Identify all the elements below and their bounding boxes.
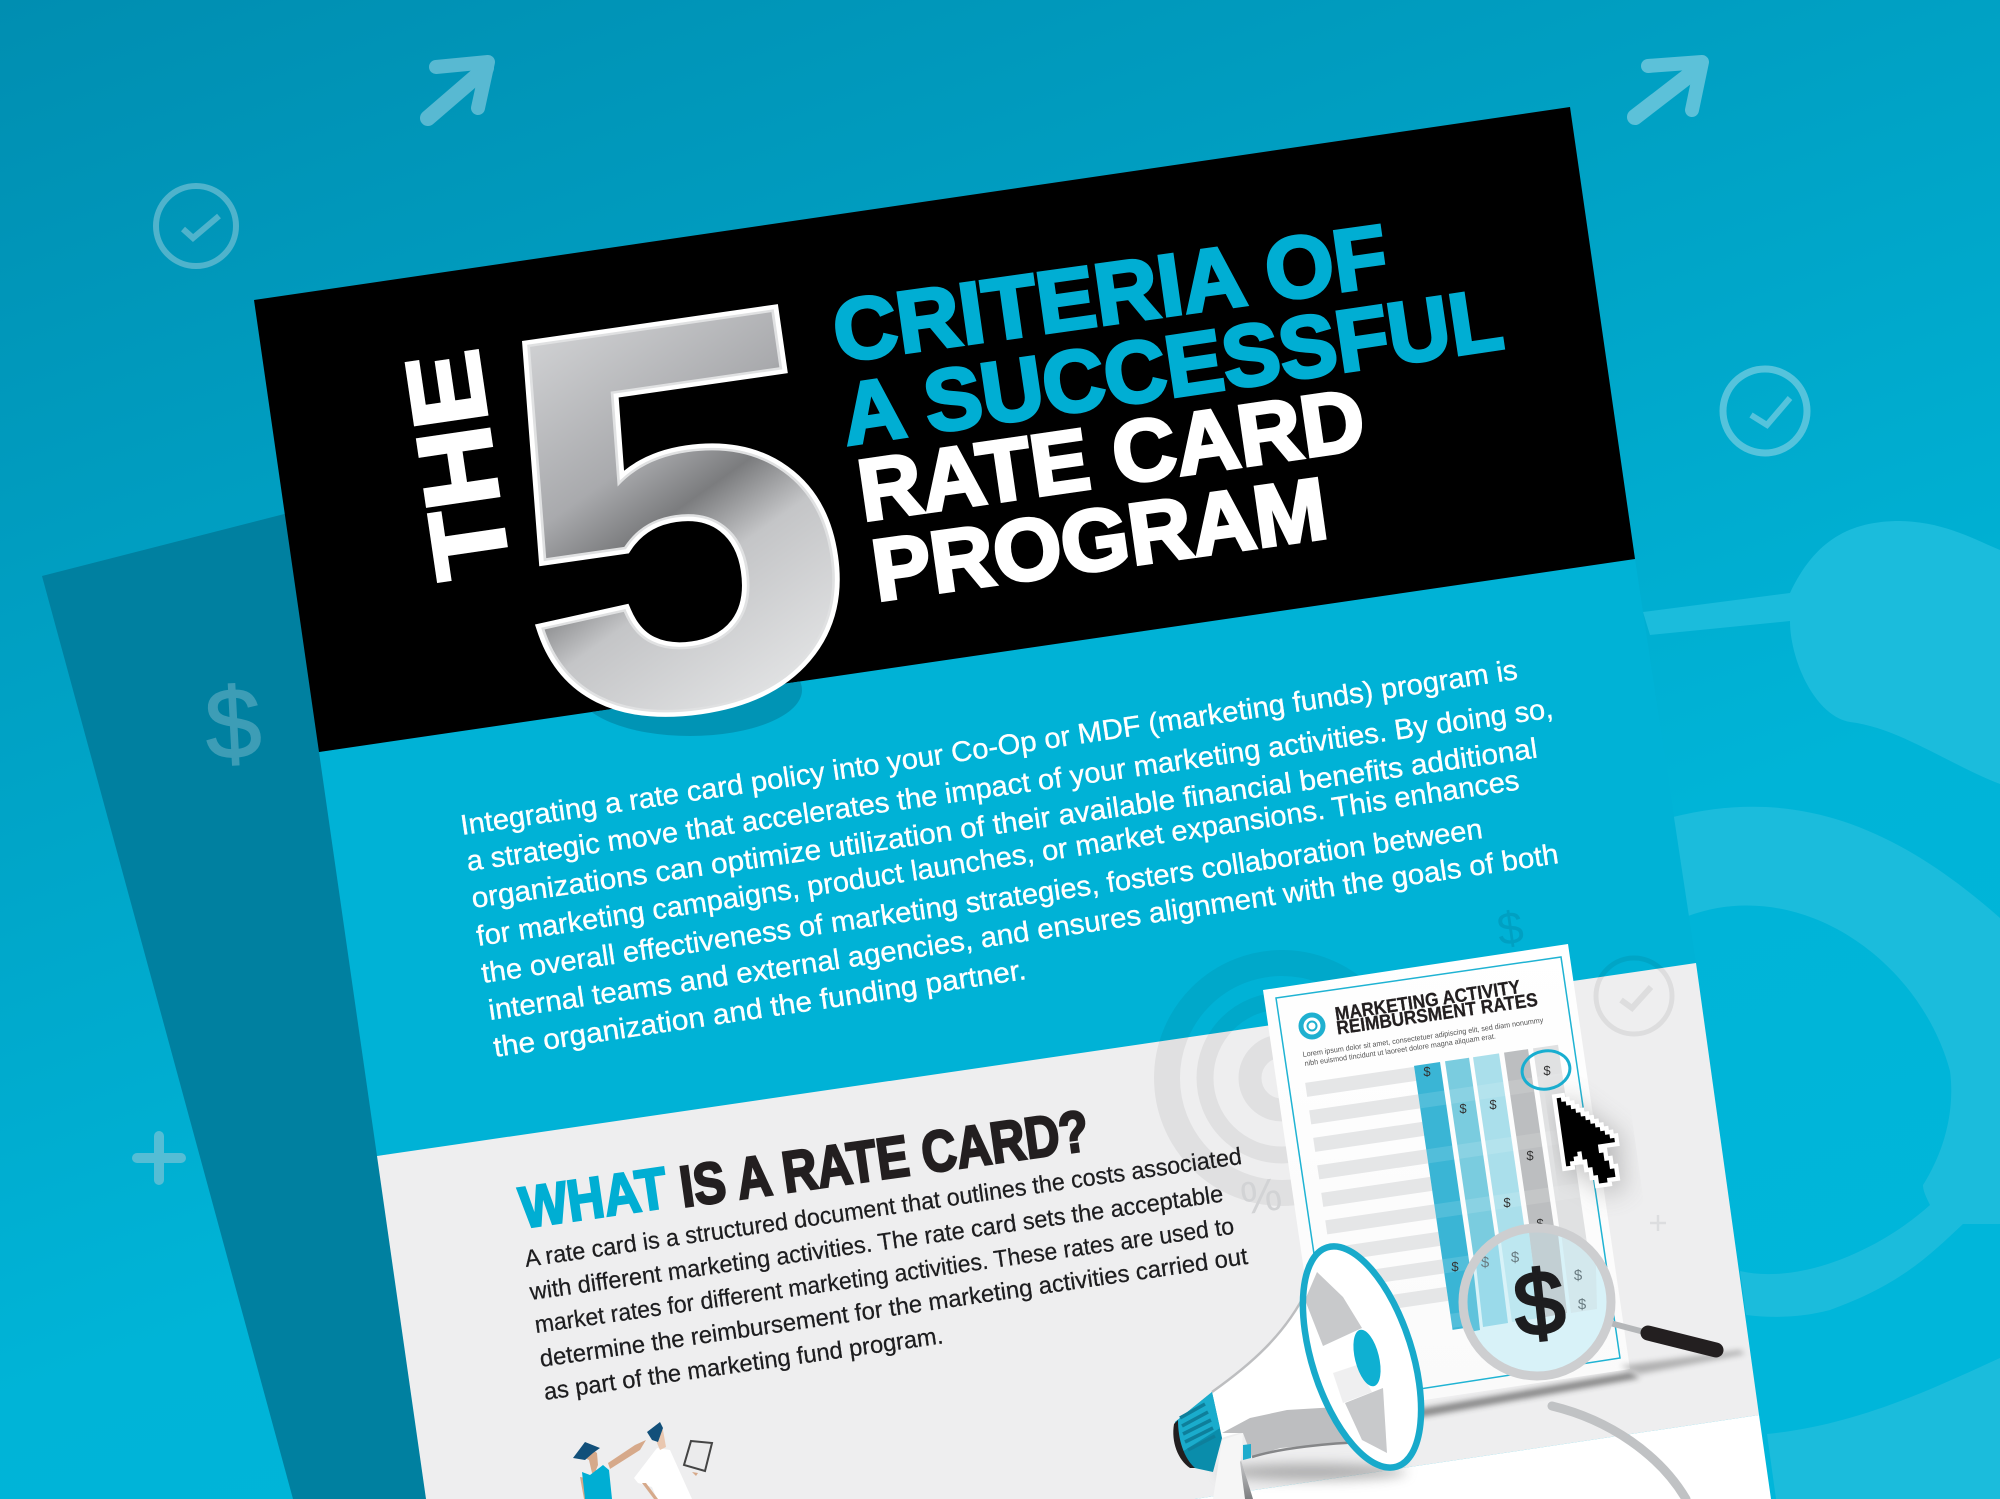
heading: what is a rate card: WHAT: [516, 1155, 671, 1241]
woman: [573, 1440, 646, 1499]
megaphone mouth: [1300, 1243, 1424, 1471]
title: blue lines: CRITERIA OF: [827, 207, 1393, 381]
intro paragraph: the overall effectiveness of marketing strategies, fosters collaboration between: [479, 813, 1485, 990]
lens dollars: $: [1481, 1254, 1490, 1271]
faded icon: percent: %: [1237, 1167, 1285, 1225]
icon: check circle left: [156, 186, 236, 266]
lens dollars: $: [1578, 1296, 1587, 1313]
card lorem text: Lorem ipsum dolor sit amet, consectetuer adipiscing elit, sed diam nonummy: [1302, 1015, 1544, 1059]
rate card definition text: determine the reimbursement for the marketing activities carried out: [538, 1243, 1250, 1373]
lens dollars: $: [1574, 1267, 1583, 1284]
panel: grey what is section: [377, 963, 1759, 1499]
intro paragraph: [458, 654, 1561, 1064]
megaphone body: [1212, 1290, 1385, 1466]
heading: what is a rate card: [516, 1098, 1093, 1241]
card table dollars: $: [1451, 1259, 1459, 1274]
faded icon: check circle: [1596, 958, 1672, 1034]
icon: arrow top left: [428, 62, 488, 118]
card table dollars: $: [1543, 1063, 1551, 1078]
card table dollars: $: [1489, 1097, 1497, 1112]
illustration: rate card document: [1263, 944, 1640, 1428]
clipboard: [684, 1441, 712, 1471]
card logo: [1301, 1015, 1323, 1037]
numeral 5: 5: [470, 190, 881, 840]
card table dollars: $: [1536, 1216, 1544, 1231]
megaphone cap: [1173, 1392, 1222, 1472]
man: [634, 1422, 692, 1499]
background swirl shapes: [1643, 521, 2000, 1499]
lens dollars: $: [1511, 1249, 1520, 1266]
rate card definition text: with different marketing activities. The rate card sets the acceptable: [527, 1181, 1225, 1306]
numeral 5: 5: [470, 190, 881, 840]
faded icon: dollar: $: [1494, 900, 1526, 956]
title: blue lines: A SUCCESSFUL: [836, 271, 1509, 464]
title: white lines: RATE CARD: [852, 371, 1370, 540]
intro paragraph: a strategic move that accelerates the impact of your marketing activities. By doing so,: [464, 693, 1555, 878]
background page shape: [42, 510, 440, 1499]
shadow of numeral: [592, 682, 802, 736]
panel: black header: [254, 107, 1635, 752]
card lorem text: nibh euismod tincidunt ut laoreet dolore magna aliquam erat.: [1304, 1032, 1496, 1068]
card table dollars: [1423, 1063, 1551, 1274]
icon: plus: [137, 1136, 181, 1180]
illustration: two people with clipboard: [573, 1422, 712, 1499]
panel: blue intro section: [319, 559, 1696, 1156]
icon: arrow top right: [1635, 62, 1702, 117]
heading: what is a rate card: IS A RATE CARD?: [676, 1098, 1093, 1220]
faded rings behind card: [1167, 963, 1397, 1193]
highlight ellipse: [1519, 1047, 1573, 1093]
title: THE: THE: [384, 343, 533, 586]
card table: [1305, 1045, 1597, 1346]
title: white lines: [852, 371, 1370, 620]
rate card definition text: as part of the marketing fund program.: [542, 1322, 945, 1406]
rate card definition text: A rate card is a structured document that outlines the costs associated: [523, 1143, 1243, 1273]
illustration: megaphone: [1173, 1243, 1424, 1499]
title: white lines: PROGRAM: [866, 460, 1333, 620]
rate card definition text: market rates for different marketing activities. These rates are used to: [533, 1213, 1236, 1339]
card title: REIMBURSMENT RATES: [1335, 990, 1539, 1039]
illustration: magnifying glass: [1440, 1220, 1745, 1377]
card table dollars: $: [1459, 1101, 1467, 1116]
icon: dollar left: $: [202, 667, 264, 781]
card table dollars: $: [1526, 1148, 1534, 1163]
intro paragraph: for marketing campaigns, product launches, or market expansions. This enhances: [474, 765, 1521, 953]
card title: MARKETING ACTIVITY: [1334, 977, 1522, 1025]
megaphone handle: [1213, 1433, 1253, 1499]
icon: check circle right: [1723, 369, 1807, 453]
lens big dollar: $: [1509, 1252, 1569, 1356]
numeral 5: 5: [470, 190, 881, 840]
card table dollars: $: [1423, 1064, 1431, 1079]
faded icon: plus: [1650, 1215, 1666, 1231]
icon: pixel cursor: [1556, 1086, 1625, 1194]
intro paragraph: the organization and the funding partner.: [491, 954, 1028, 1064]
rate card definition text: [523, 1143, 1250, 1406]
intro paragraph: organizations can optimize utilization of their available financial benefits additional: [469, 733, 1539, 915]
intro paragraph: Integrating a rate card policy into your Co-Op or MDF (marketing funds) program is: [458, 654, 1520, 842]
panel: white footer section: [1195, 1415, 1771, 1499]
card table dollars: $: [1503, 1195, 1511, 1210]
lens dollars: [1481, 1249, 1587, 1313]
arc in footer: [1552, 1406, 1686, 1499]
intro paragraph: internal teams and external agencies, and ensures alignment with the goals of both: [486, 838, 1561, 1027]
